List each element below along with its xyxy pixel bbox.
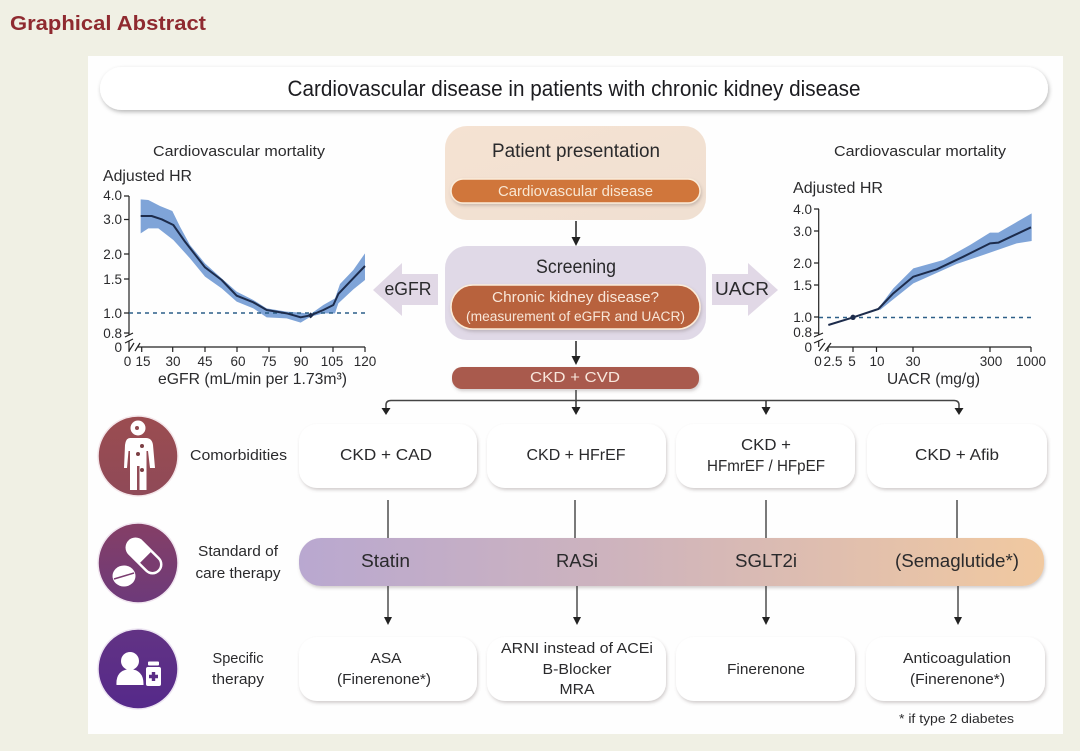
- box: CKD + HFrEF: CKD + HFrEF: [526, 447, 626, 464]
- box: Finerenone: Finerenone: [727, 661, 805, 678]
- panel: screening: [445, 246, 706, 340]
- x tick labels left: 90: [293, 354, 309, 369]
- pill: chronic kidney disease: [451, 285, 700, 329]
- y tick labels right: 1.0: [793, 310, 812, 325]
- y tick labels right: 3.0: [793, 224, 812, 239]
- label: standard of care therapy: [196, 543, 281, 582]
- row: specific therapy boxes: [299, 637, 1045, 701]
- x tick labels right: 5: [848, 354, 856, 369]
- confidence band left: [141, 199, 365, 323]
- arrows to specific therapy: [384, 586, 962, 625]
- x axis title right: UACR (mg/g): [887, 371, 980, 388]
- y tick labels left: 1.5: [103, 272, 122, 287]
- bar: standard of care therapy: [299, 538, 1044, 586]
- pill: cardiovascular disease: Cardiovascular disease: [498, 183, 653, 200]
- y tick labels right: [793, 202, 812, 355]
- box: CKD + CAD: CKD + CAD: [340, 447, 432, 464]
- label: standard of care therapy: care therapy: [196, 565, 281, 582]
- x tick labels left: 105: [321, 354, 343, 369]
- y tick labels left: [103, 188, 122, 355]
- icon: standard of care pills: [98, 523, 178, 603]
- box: Anticoagulation: [866, 637, 1045, 701]
- panel: screening: Screening: [536, 257, 616, 278]
- reference line right: [819, 316, 1032, 318]
- axes left: [124, 196, 365, 352]
- bar: standard of care therapy: (Semaglutide*): [895, 551, 1019, 571]
- y tick labels left: 2.0: [103, 247, 122, 262]
- y tick labels right: 0.8: [793, 325, 812, 340]
- x tick labels right: 30: [905, 354, 921, 369]
- connector lines to therapy bar: [388, 500, 957, 538]
- bar: CKD + CVD: CKD + CVD: [530, 369, 620, 386]
- box: Anticoagulation: (Finerenone*): [910, 671, 1005, 688]
- x tick labels right: 0: [814, 354, 822, 369]
- box: CKD + Afib: CKD + Afib: [915, 447, 999, 464]
- box: CKD + HFmrEF / HFpEF: CKD +: [741, 437, 791, 454]
- box: CKD + CAD: [299, 424, 477, 488]
- reference line left: [129, 312, 366, 314]
- panel: patient presentation: [445, 126, 706, 220]
- icon: comorbidities: [98, 416, 178, 496]
- box: CKD + Afib: [867, 424, 1047, 488]
- box: ASA: ASA: [370, 650, 402, 667]
- y tick labels left: 3.0: [103, 212, 122, 227]
- label: standard of care therapy: Standard of: [198, 543, 279, 560]
- label: specific therapy: therapy: [212, 671, 265, 688]
- chart: UACR vs cardiovascular mortality: [793, 143, 1046, 388]
- chart: eGFR vs cardiovascular mortality: [103, 143, 376, 388]
- box: ARNI: MRA: [560, 681, 594, 698]
- label: specific therapy: Specific: [212, 650, 264, 667]
- y tick labels left: 0: [114, 340, 122, 355]
- y tick labels right: 1.5: [793, 278, 812, 293]
- box: ASA: [299, 637, 477, 701]
- arrow: eGFR: eGFR: [384, 279, 432, 299]
- arrow: UACR: [712, 263, 778, 316]
- icon: specific therapy: [98, 629, 178, 709]
- x axis title left: eGFR (mL/min per 1.73m³): [158, 371, 347, 388]
- x tick labels right: [814, 354, 1046, 369]
- curve left: [141, 216, 365, 318]
- label: comorbidities: Comorbidities: [190, 447, 287, 464]
- label: specific therapy: [212, 650, 265, 688]
- box: Anticoagulation: Anticoagulation: [903, 650, 1011, 667]
- x tick labels left: 45: [197, 354, 213, 369]
- y tick labels left: 4.0: [103, 188, 122, 203]
- title bar: Cardiovascular disease in patients with chronic kidney disease: [288, 76, 860, 101]
- bar: standard of care therapy: Statin: [361, 551, 410, 571]
- axes right: [814, 209, 1031, 352]
- x tick labels left: 60: [230, 354, 246, 369]
- x tick labels left: 75: [261, 354, 277, 369]
- x tick labels left: [124, 354, 376, 369]
- box: CKD + HFmrEF / HFpEF: HFmrEF / HFpEF: [707, 458, 825, 475]
- pill: cardiovascular disease: [451, 179, 700, 203]
- x tick labels left: 120: [354, 354, 376, 369]
- x tick labels right: 2.5: [824, 354, 842, 369]
- arrow: UACR: UACR: [715, 279, 769, 299]
- row: comorbidity boxes: [299, 424, 1047, 488]
- curve right: [828, 227, 1031, 325]
- y tick labels right: 0: [804, 340, 812, 355]
- branching arrows: [382, 390, 964, 415]
- box: CKD + HFmrEF / HFpEF: [676, 424, 855, 488]
- x tick labels right: 300: [980, 354, 1002, 369]
- y tick labels right: 4.0: [793, 202, 812, 217]
- bar: standard of care therapy: RASi: [556, 551, 598, 571]
- box: ARNI: ARNI instead of ACEi: [501, 640, 653, 657]
- y tick labels left: 0.8: [103, 326, 122, 341]
- box: Finerenone: [676, 637, 855, 701]
- y axis title right: Adjusted HR: [793, 180, 883, 197]
- x tick labels right: 1000: [1016, 354, 1046, 369]
- box: CKD + HFrEF: [487, 424, 666, 488]
- box: ARNI: B-Blocker: [542, 661, 612, 678]
- x tick labels left: 15: [135, 354, 151, 369]
- box: ASA: (Finerenone*): [337, 671, 431, 688]
- y tick labels right: 2.0: [793, 256, 812, 271]
- arrow: screening to CKD + CVD: [572, 341, 580, 365]
- y axis title left: Adjusted HR: [103, 168, 192, 185]
- confidence band right: [878, 213, 1032, 310]
- footnote: * if type 2 diabetes: [899, 712, 1014, 726]
- bar: standard of care therapy: SGLT2i: [735, 551, 797, 571]
- x tick labels left: 0: [124, 354, 131, 369]
- box: ARNI: [487, 637, 666, 701]
- arrow: eGFR: [373, 263, 438, 316]
- title bar: [100, 67, 1048, 110]
- pill: chronic kidney disease: (measurement of eGFR and UACR): [466, 309, 685, 324]
- x tick labels left: 30: [165, 354, 181, 369]
- pill: chronic kidney disease: Chronic kidney disease?: [492, 289, 659, 306]
- arrow: presentation to screening: [572, 221, 580, 246]
- panel: patient presentation: Patient presentation: [492, 141, 660, 162]
- chart title right: Cardiovascular mortality: [834, 143, 1007, 160]
- y tick labels left: 1.0: [103, 306, 122, 321]
- bar: CKD + CVD: [452, 367, 699, 389]
- heading: Graphical Abstract: Graphical Abstract: [10, 13, 206, 35]
- chart title left: Cardiovascular mortality: [153, 143, 326, 160]
- x tick labels right: 10: [869, 354, 885, 369]
